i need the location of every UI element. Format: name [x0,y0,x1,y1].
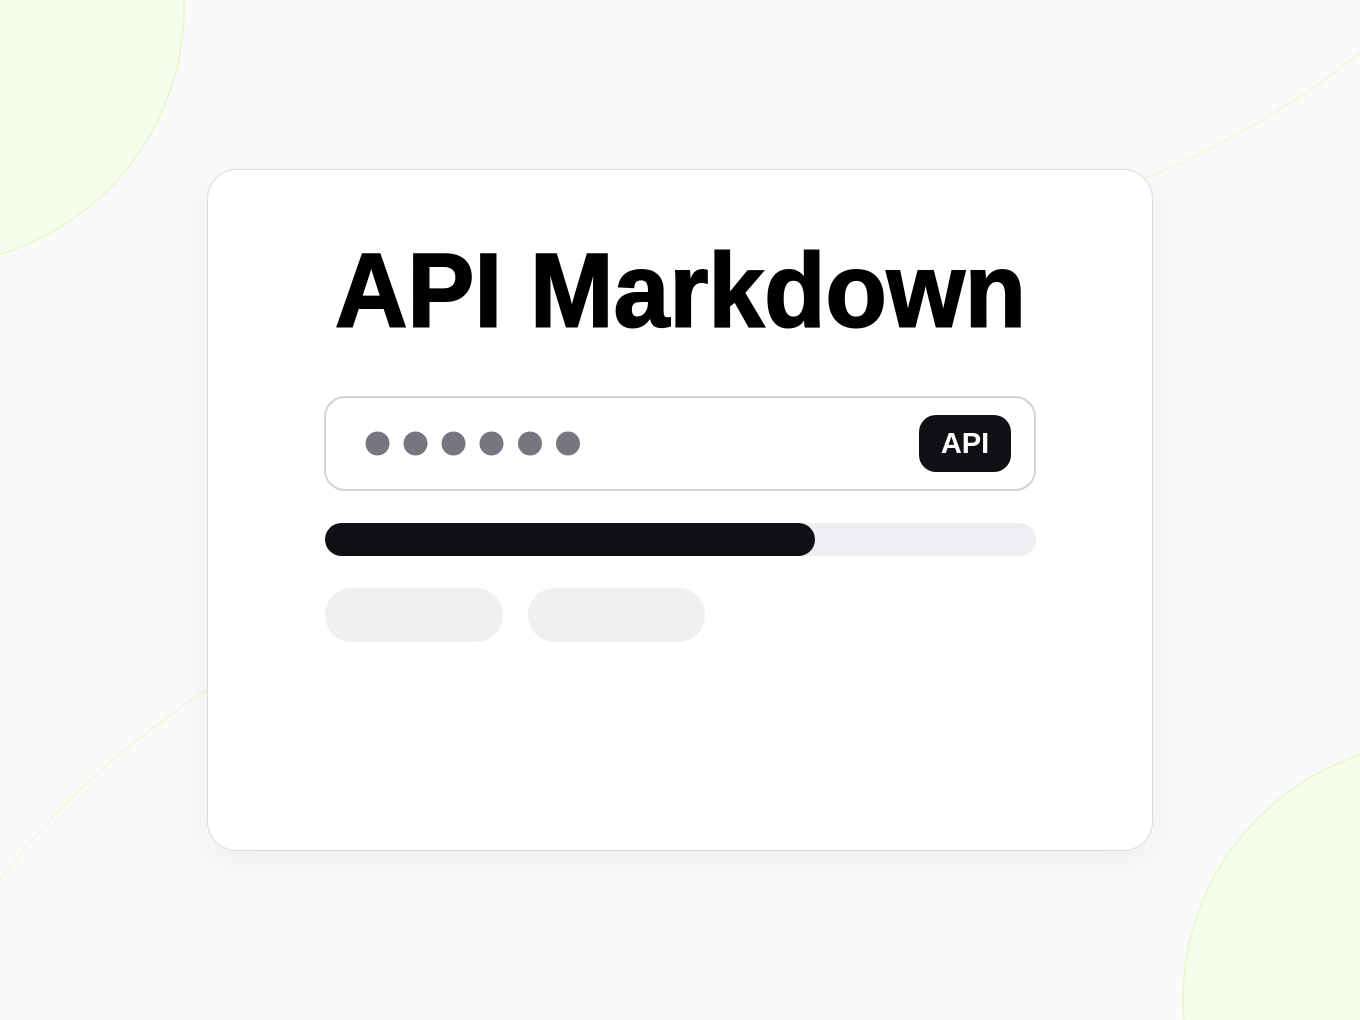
circle: bottom-right green [1183,755,1360,1020]
input field [324,396,1036,491]
circle: top-left green [0,0,184,254]
curve: top-right [1143,53,1360,179]
title: API Markdown [335,232,1026,350]
curve: bottom-left [0,689,208,880]
password dots [366,432,580,456]
progress bar [325,523,1036,556]
pill placeholder 2 [528,588,705,642]
API badge [919,415,1011,472]
API badge: API [941,428,989,460]
panel: main card [207,169,1153,851]
progress fill [325,523,815,556]
pill placeholder 1 [325,588,503,642]
